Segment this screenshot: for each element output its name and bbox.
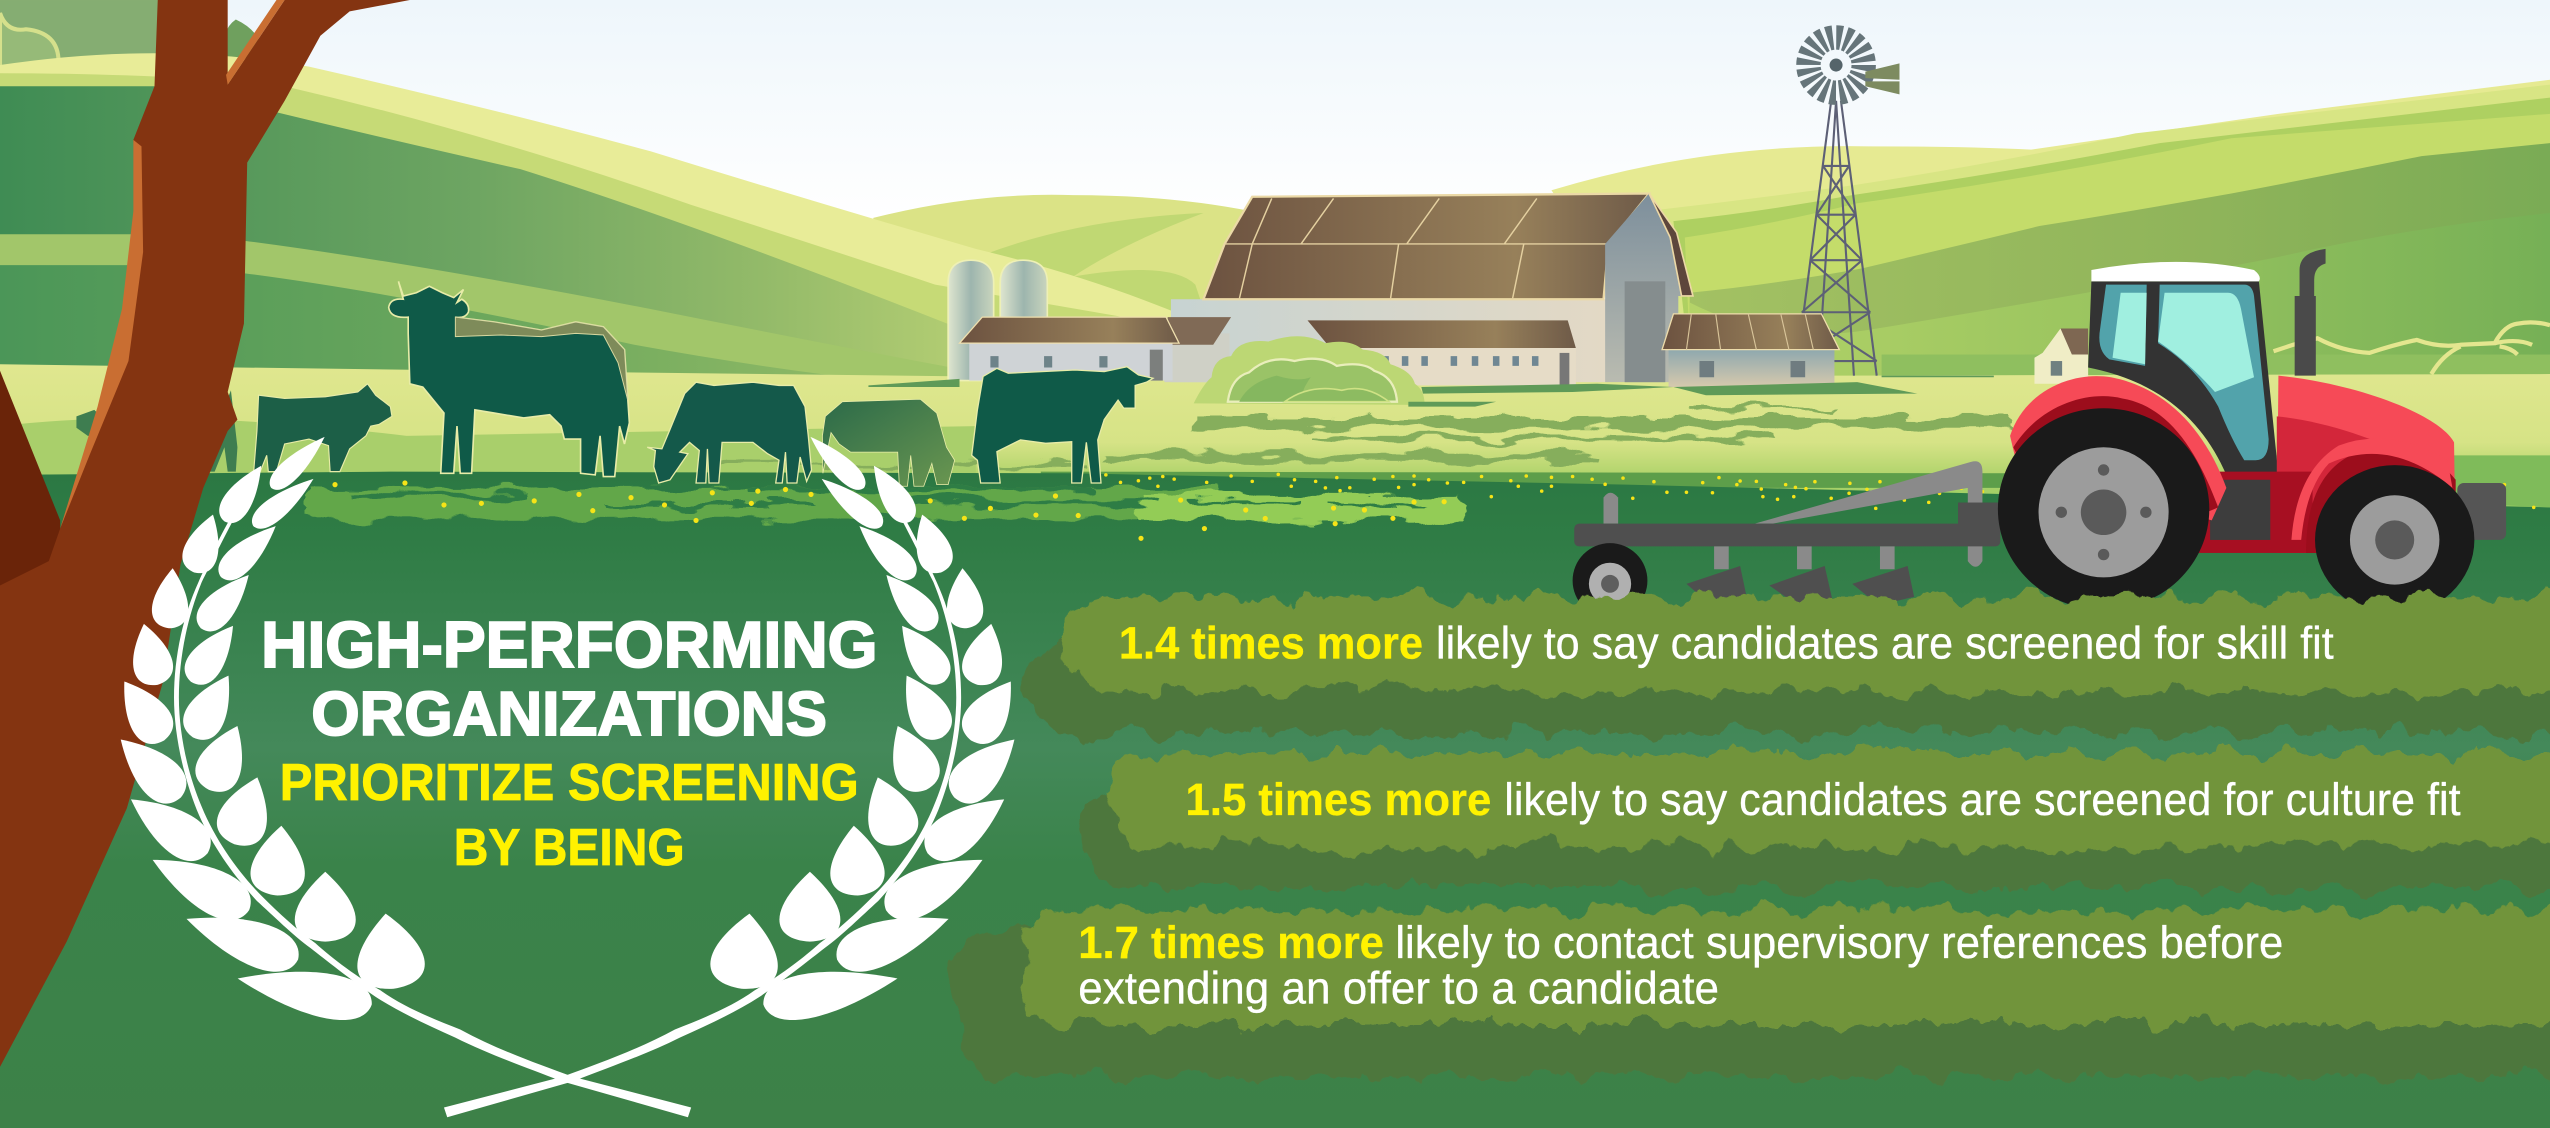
exhaust [2295, 249, 2326, 376]
cab frame [2088, 281, 2278, 475]
grass shadow patches [350, 488, 1431, 507]
cab windows [2099, 285, 2147, 366]
hedge 2 foliage [1109, 753, 2550, 847]
windmill tail [1865, 63, 1899, 94]
distant bush outline [2274, 322, 2550, 374]
right shed [1662, 314, 1839, 387]
stat text 1: likely to say candidates are screened for skill fit [1436, 618, 2334, 669]
cow: grazing, lighter [822, 399, 955, 486]
tree [0, 0, 410, 1067]
front wheel [2315, 465, 2474, 615]
plough frame [1755, 461, 1982, 567]
wreath: right branch [444, 429, 1029, 1117]
stat text 2: 1.5 times more [1186, 774, 1491, 825]
long low building [1308, 320, 1576, 385]
main barn [1171, 194, 1693, 382]
cow: large standing [389, 281, 629, 477]
cab roof [2091, 262, 2260, 281]
tree: dark back trunk [0, 371, 60, 602]
stat hedge 1 [1034, 597, 2550, 732]
right-hand ground band [2277, 455, 2550, 507]
hedge 3 foliage [1020, 911, 2550, 1025]
farm building shadows [868, 376, 1994, 407]
distant house [2034, 329, 2088, 384]
rear fender [2010, 376, 2226, 520]
hedge 3 shadow [953, 930, 2550, 1077]
front weight [2457, 483, 2506, 540]
laurel wreath [106, 429, 1029, 1117]
hedge 1 foliage [1060, 597, 2550, 691]
tree: main trunk [0, 0, 410, 1067]
windmill tower [1795, 101, 1877, 376]
headline: yellow lines: PRIORITIZE SCREENING [280, 754, 859, 812]
small barn [960, 317, 1231, 382]
field shade patches [716, 407, 2008, 467]
bush [1194, 336, 1425, 405]
headline: yellow lines: BY BEING [454, 819, 685, 877]
cow: grazing [647, 382, 812, 483]
stat text 2: likely to say candidates are screened for culture fit [1504, 774, 2461, 825]
stat text 3: extending an offer to a candidate [1078, 962, 1719, 1013]
mid-ground field [0, 364, 2550, 520]
rear wheel [1998, 408, 2209, 610]
tree: highlight edges [60, 0, 285, 529]
stat hedge 2 [1080, 753, 2550, 888]
headline: yellow lines [280, 754, 859, 877]
hedge 1 shadow [1034, 638, 2550, 732]
yellow flowers [335, 474, 2534, 538]
headline [261, 608, 878, 877]
cow: calf [254, 384, 392, 472]
hood [2277, 376, 2456, 553]
headline: white lines [261, 608, 878, 749]
stat text 3: 1.7 times more [1078, 917, 1384, 968]
implement (plough) [1573, 461, 2007, 618]
far-left field band [0, 418, 976, 475]
stat text 1: 1.4 times more [1119, 618, 1423, 669]
plough shares [1714, 546, 1895, 569]
stat hedge 3 [953, 911, 2550, 1077]
plough wheel [1573, 543, 1647, 618]
cow: facing right [972, 367, 1153, 483]
cow: far, behind tree [76, 390, 237, 472]
hedge 2 shadow [1080, 790, 2550, 888]
headline: white lines: HIGH-PERFORMING [261, 608, 878, 681]
sunlit grass patch [309, 488, 1464, 520]
windmill [1795, 37, 1899, 376]
headline: white lines: ORGANIZATIONS [311, 680, 827, 749]
background hills [0, 0, 2550, 390]
silos [948, 260, 1047, 381]
grass olive strip [1041, 472, 2017, 488]
foreground ground [0, 472, 2550, 1128]
sky [0, 0, 2550, 220]
windmill fan [1808, 37, 1864, 93]
wreath: left branch [106, 429, 691, 1117]
tractor [1998, 249, 2506, 615]
stat text 3: likely to contact supervisory references before [1395, 917, 2283, 968]
chassis [2199, 472, 2313, 553]
front fender [2306, 449, 2456, 553]
